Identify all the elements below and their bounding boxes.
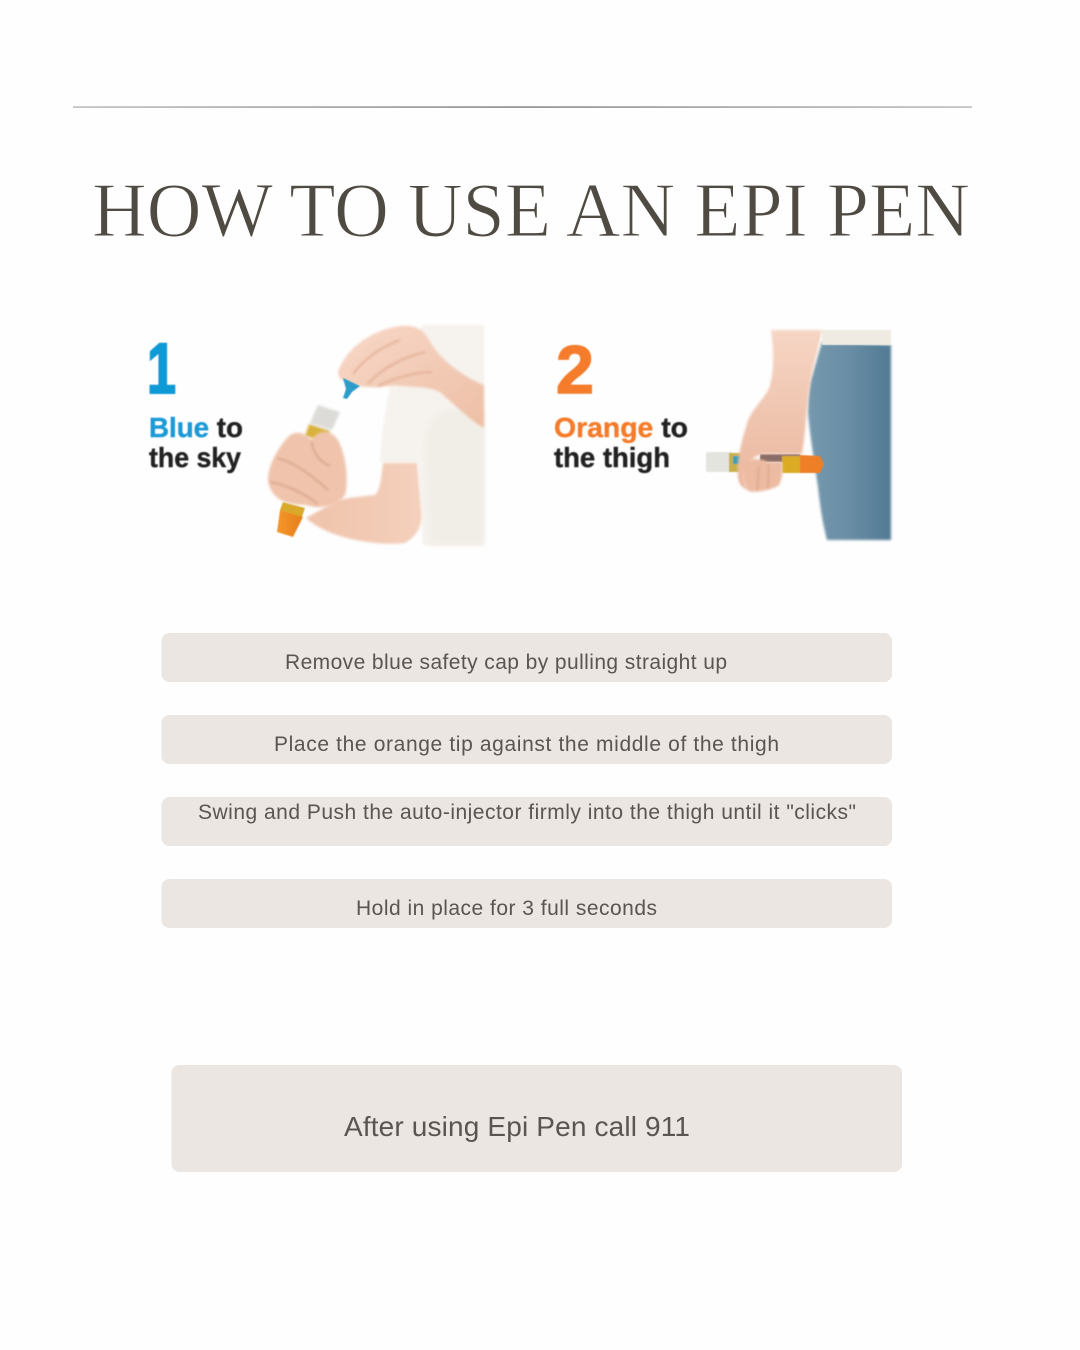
callout: call 911 (172, 1065, 902, 1172)
the thigh caption: the thigh (554, 442, 670, 473)
panel: step 2 photo, orange to the thigh (550, 330, 891, 540)
white shirt hem (822, 330, 891, 345)
number 2: 2 (556, 332, 594, 408)
step bar: hold: Hold in place for 3 full seconds (356, 897, 657, 920)
pen orange tip (277, 502, 305, 537)
step bar: swing and push: Swing and Push the auto-injector firmly into the thigh until it "clicks" (198, 801, 856, 824)
orange to caption: Orange to (554, 412, 688, 443)
callout: call 911: After using Epi Pen call 911 (344, 1111, 690, 1142)
pen (706, 452, 824, 473)
step bar: remove cap: Remove blue safety cap by pulling straight up (285, 651, 727, 674)
pen top (305, 405, 340, 442)
panel: step 1 photo, blue to the sky (146, 325, 484, 545)
jeans (808, 342, 891, 540)
top rule (73, 106, 972, 108)
step bar: place tip: Place the orange tip against the middle of the thigh (274, 733, 779, 756)
blue cap (343, 378, 360, 399)
step bar: swing and push (162, 797, 892, 846)
arm and hand (738, 330, 822, 492)
blue to caption: Blue to (149, 412, 243, 443)
step bar: remove cap (162, 633, 892, 682)
fist (268, 432, 347, 507)
raised hand (338, 326, 484, 428)
step bar: hold (162, 879, 892, 928)
forearm (306, 463, 421, 544)
step bar: place tip (162, 715, 892, 764)
shirt (380, 325, 484, 545)
title: HOW TO USE AN EPI PEN (92, 167, 970, 253)
number 1: 1 (147, 330, 176, 409)
the sky caption: the sky (149, 442, 241, 473)
